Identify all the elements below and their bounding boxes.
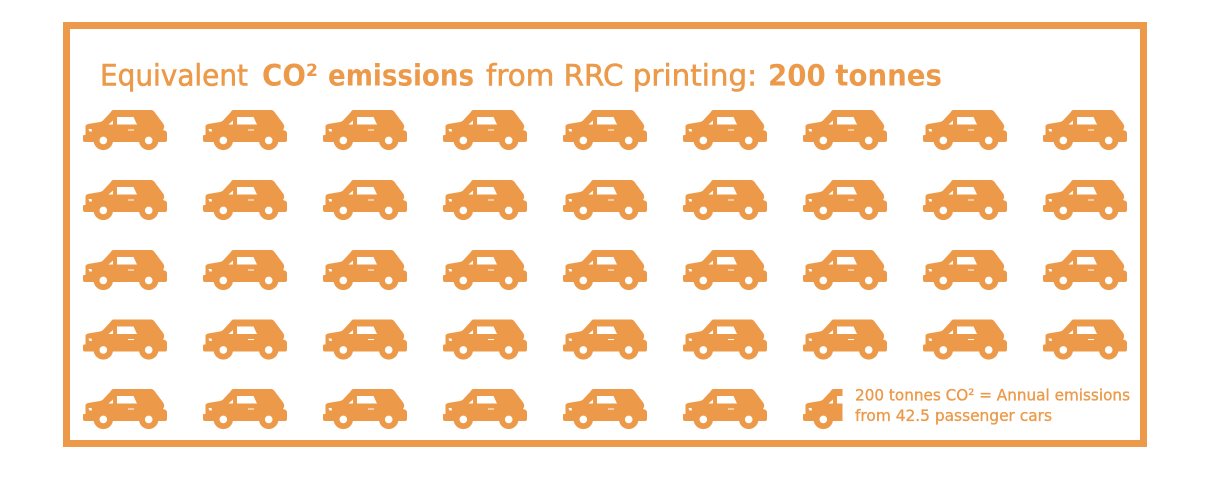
title: Equivalent — [100, 58, 248, 92]
frame — [66, 26, 1144, 444]
row 4 of cars — [83, 320, 1127, 360]
car grid — [83, 110, 1127, 429]
row 1 of cars — [83, 110, 1127, 150]
legend note — [855, 386, 1130, 425]
title: CO² — [262, 58, 318, 92]
row 5 of cars — [83, 389, 767, 429]
legend note: 200 tonnes CO² = Annual emissions — [855, 386, 1130, 404]
title — [100, 58, 942, 92]
title: from RRC printing: — [486, 58, 757, 92]
title: 200 tonnes — [768, 58, 942, 92]
row 3 of cars — [83, 250, 1127, 290]
infographic — [63, 22, 1147, 447]
title: emissions — [328, 58, 474, 92]
legend note: from 42.5 passenger cars — [855, 406, 1052, 425]
icon: half car — [803, 389, 842, 430]
row 2 of cars — [83, 180, 1127, 220]
